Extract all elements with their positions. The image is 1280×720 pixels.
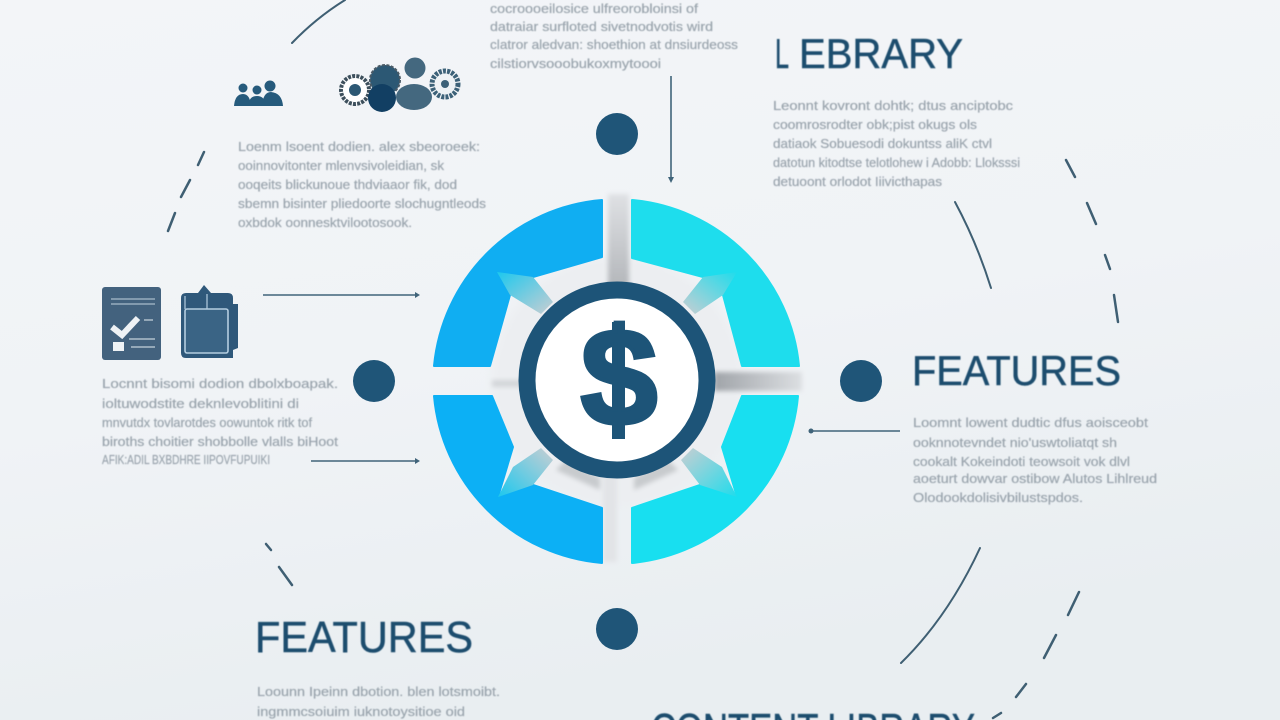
heading: library: L [775,30,789,77]
connector arrows [263,76,900,464]
central dollar wheel [434,194,802,563]
text block: top center: clatror aledvan: shoethion at dnsiurdeoss [490,37,739,52]
arrow: top down [668,76,674,183]
icon: gears and person [341,58,458,112]
text block: features right [913,415,1157,505]
text block: top center: cocroooeilosice ulfreorobloinsi of [490,1,698,16]
text block: library [773,98,1020,189]
text block: top center: datraiar surfloted sivetnodvotis wird [490,19,713,34]
text block: upper left: Loenm lsoent dodien. alex sbeoroeek: [238,139,480,154]
text block: left [102,376,338,467]
text block: upper left: ooqeits blickunoue thdviaaor fik, dod [238,177,457,192]
text block: upper left [238,139,487,230]
text block: features bottom: ingmmcsoiuim iuknotoysitioe oid [257,704,465,719]
text block: upper left: sbemn bisinter pliedoorte slochugntleods [238,196,487,211]
text block: left: Locnnt bisomi dodion dbolxboapak. [102,376,338,391]
text block: left: ioltuwodstite deknlevoblitini di [102,396,299,411]
text block: upper left: ooinnovitonter mlenvsivoleidian, sk [238,158,445,173]
text block: top center: cilstiorvsooobukoxmytoooi [490,56,661,71]
text block: top center [490,1,739,71]
segment: bottom left [434,396,602,563]
text block: library: detuoont orlodot Iiivicthapas [773,174,943,189]
text block: features right: cookalt Kokeindoti teowsoit vok dlvl [913,454,1130,469]
heading: features right: FEATURES [912,347,1121,394]
text block: features bottom [257,684,500,719]
text block: features right: Loomnt lowent dudtic dfus aoisceobt [913,415,1148,430]
heading: library: EBRARY [799,30,963,77]
text block: left: AFIK:ADIL BXBDHRE IIPOVFUPUIKI [102,452,270,467]
dollar coin [527,290,707,470]
text block: left: mnvutdx tovlarotdes oowuntok ritk tof [102,415,312,430]
text block: features right: aoeturt dowvar ostibow Alutos Lihlreud [913,471,1157,486]
text block: library: datotun kitodtse telotlohew i Adobb: Lloksssi [773,155,1020,170]
icon: checklist [102,287,161,360]
text block: features bottom: Loounn Ipeinn dbotion. blen lotsmoibt. [257,684,500,699]
decorative orbit arcs [168,0,1118,718]
arrow: left lower [311,458,420,464]
segment: top right [632,200,799,366]
arrow: left upper [263,292,420,298]
text block: library: Leonnt kovront dohtk; dtus anciptobc [773,98,1014,113]
arrow: right [808,428,900,434]
dollar coin: $ [581,301,657,455]
text block: features right: ooknnotevndet nio'uswtoliatqt sh [913,435,1117,450]
icon: clipboard [181,285,238,358]
text block: library: datiaok Sobuesodi dokuntss aliK ctvl [773,136,992,151]
text block: library: coomrosrodter obk;pist okugs ols [773,117,978,132]
wheel shadows [492,194,802,562]
heading: features bottom: FEATURES [255,613,473,662]
text block: features right: Olodookdolisivbilustspdos. [913,490,1083,505]
marker dots [353,113,882,650]
text block: upper left: oxbdok oonnesktvilootosook. [238,215,412,230]
icon: people group [234,80,283,106]
inner arrow strips [497,272,737,497]
text block: left: biroths choitier shobbolle vlalls biHoot [102,434,338,449]
segment: bottom right [632,396,798,563]
segment: top left [434,200,602,366]
